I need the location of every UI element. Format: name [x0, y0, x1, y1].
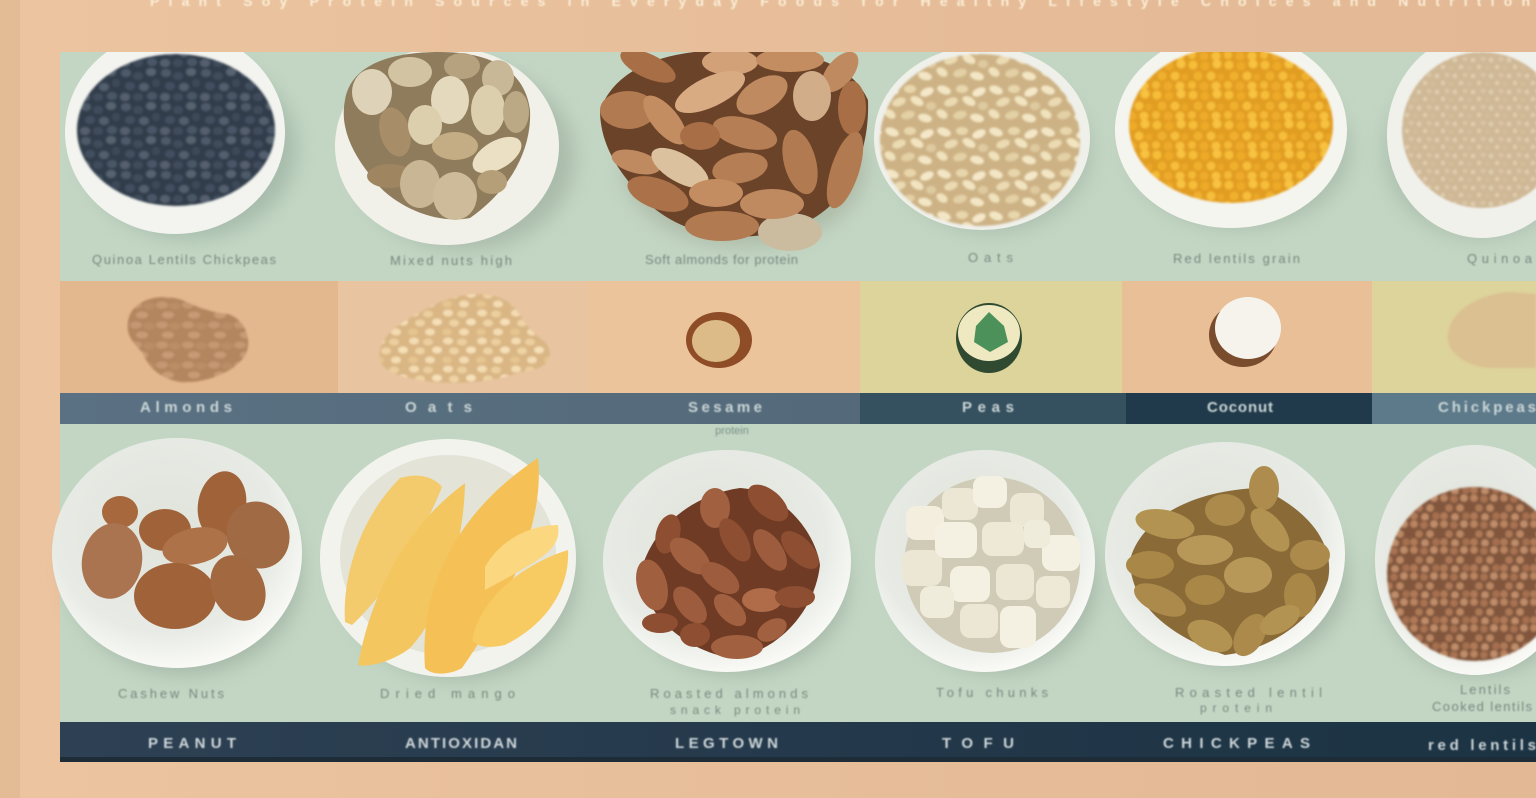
- bowl: black beans: [65, 30, 296, 238]
- bowl: pale grains: [874, 46, 1090, 232]
- label: almonds line 2: snack protein: [670, 703, 800, 717]
- label: chickpeas: CHICKPEAS: [1163, 735, 1310, 752]
- icon: almond: [128, 297, 248, 382]
- top row labels: [92, 250, 1533, 268]
- row: top bowls: [65, 30, 1536, 251]
- left edge strip: [0, 0, 20, 798]
- label: peanut: PEANUT: [148, 735, 236, 752]
- bowl: tan seeds: [1385, 32, 1536, 238]
- band segment dark: [1126, 393, 1372, 424]
- icon: oat pile: [379, 294, 550, 383]
- label: lentils: red lentils: [1428, 737, 1536, 754]
- plate: red-brown almonds: [603, 450, 851, 674]
- band background: [60, 722, 1536, 762]
- label: tan pile: Chickpeas: [1438, 399, 1536, 416]
- label: lentils: Red lentils grain: [1173, 251, 1300, 266]
- label: legumes: LEGTOWN: [675, 735, 778, 752]
- label: tofu: TOFU: [942, 735, 1014, 752]
- pile: almonds: [600, 42, 871, 251]
- label: grains: Oats: [968, 250, 1014, 265]
- icon: green vegetable: [956, 303, 1022, 373]
- tile 3: [588, 281, 860, 393]
- icon: seed bowl: [686, 312, 752, 368]
- label: brown nuts: Cashew Nuts: [118, 686, 224, 701]
- bowl: mixed nuts: [335, 47, 575, 250]
- tile 2: [338, 281, 588, 393]
- row: bottom plates: [52, 438, 1536, 678]
- plate: brown nuts: [52, 438, 302, 674]
- icon: coconut: [1209, 297, 1281, 367]
- label: seeds: Sesame: [688, 399, 762, 416]
- label: beans: Quinoa Lentils Chickpeas: [92, 252, 276, 267]
- plate: mango strips: [320, 439, 576, 678]
- label: seeds: Quinoa: [1467, 251, 1533, 266]
- label: almonds: Soft almonds for protein: [645, 252, 798, 267]
- label: brown lentils line 2: Cooked lentils: [1432, 699, 1532, 714]
- row: middle label band: [60, 393, 1536, 437]
- label: oats: Oats: [405, 399, 472, 416]
- icon: tan pile: [1448, 292, 1536, 368]
- tile 5: [1122, 281, 1372, 393]
- label: almonds: ANTIOXIDAN: [405, 735, 517, 752]
- bowl: orange lentils: [1115, 32, 1350, 228]
- label: mango: Dried mango: [380, 686, 515, 701]
- band segment left: [60, 393, 860, 424]
- label: almonds: Almonds: [140, 399, 232, 416]
- label: white chunks: Tofu chunks: [936, 685, 1048, 700]
- bottom label band: [60, 722, 1536, 762]
- label: golden nuts line 2: protein: [1200, 701, 1272, 715]
- band lower edge: [60, 757, 1536, 762]
- plate: golden nuts: [1105, 442, 1347, 666]
- band segment right: [1372, 393, 1536, 424]
- label: nuts: Mixed nuts high: [390, 253, 512, 268]
- tile 6: [1372, 281, 1536, 393]
- tile 1: [60, 281, 338, 393]
- bottom row labels: [118, 682, 1532, 717]
- label: golden nuts: Roasted lentil: [1175, 685, 1322, 700]
- row: middle peach tiles: [60, 281, 1536, 393]
- label: vegetable: Peas: [962, 399, 1014, 416]
- plate: white chunks: [875, 450, 1096, 672]
- band segment center: [860, 393, 1126, 424]
- label: almonds: Roasted almonds: [650, 686, 808, 701]
- plate: brown lentils: [1375, 445, 1536, 675]
- label: coconut: Coconut: [1207, 399, 1273, 416]
- label: brown lentils: Lentils: [1460, 682, 1510, 697]
- tile 4: [860, 281, 1122, 393]
- label: second line: protein: [715, 425, 749, 437]
